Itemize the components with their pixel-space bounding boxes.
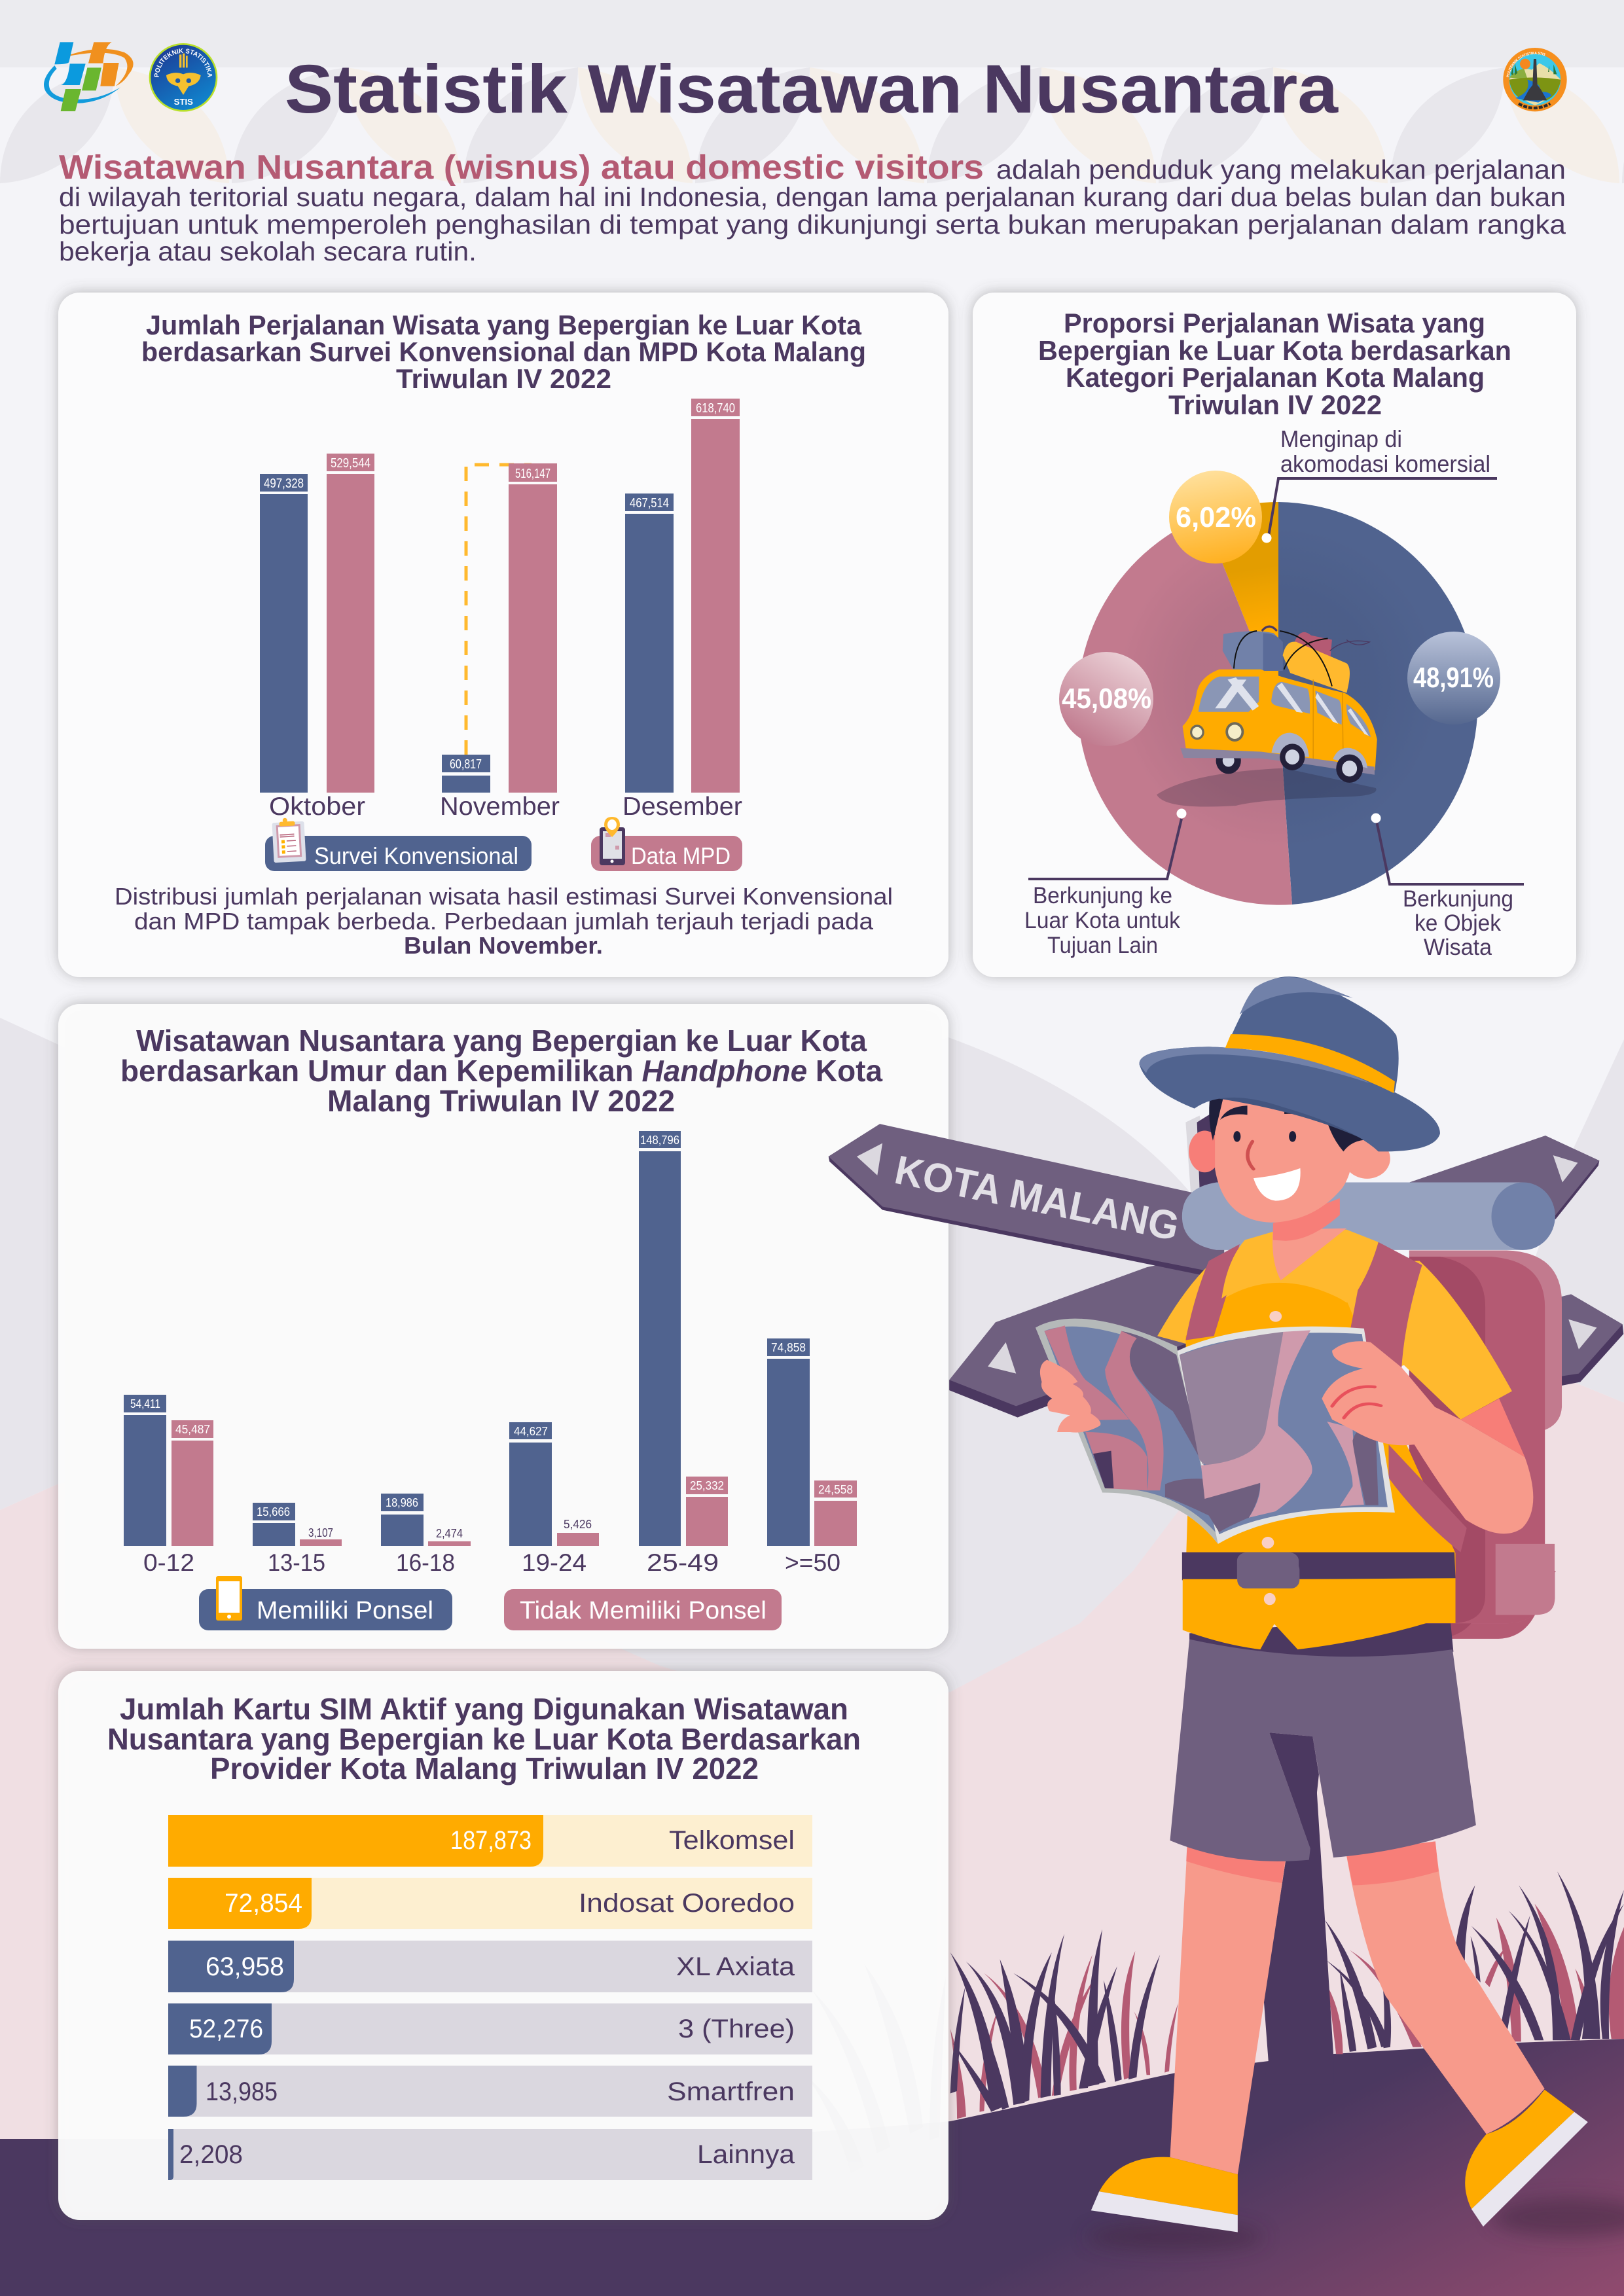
bar chart: monthly trips: 467,514: [630, 496, 669, 511]
intro text: di wilayah teritorial suatu negara, dalam hal ini Indonesia, dengan lama perjalanan kurang dari dua belas bulan dan bukan: [59, 182, 1566, 212]
bar chart: age groups: 5,426: [564, 1518, 592, 1531]
heading: Wisatawan Nusantara yang Bepergian ke Luar Kota: [136, 1024, 867, 1058]
logo: Politeknik Statistika STIS: STIS: [174, 98, 193, 107]
heading: Triwulan IV 2022: [1168, 389, 1382, 420]
intro text: bertujuan untuk memperoleh penghasilan di tempat yang dikunjungi serta bukan merupakan perjalanan dalam rangka: [59, 209, 1566, 240]
title: Statistik Wisatawan Nusantara: [285, 51, 1339, 128]
left shoe: [1091, 2157, 1238, 2232]
callout: 48,91%: [1407, 632, 1500, 725]
callout: 6,02%: [1169, 471, 1262, 564]
intro text: bekerja atau sekolah secara rutin.: [59, 236, 477, 266]
bar: Indosat Ooredoo: 72,854: [225, 1889, 302, 1918]
arrow: Kota Malang sign board: [829, 1124, 1224, 1280]
bar: Indosat Ooredoo: [168, 1878, 812, 1929]
bar: Lainnya: Lainnya: [697, 2140, 795, 2169]
logo: Kota Malang: POLITEKNIK STATISTIKA STIS: [1507, 52, 1545, 77]
bedroll: [1182, 1183, 1555, 1250]
text: chart note: dan MPD tampak berbeda. Perbedaan jumlah terjauh terjadi pada: [134, 908, 874, 935]
bar: Telkomsel: Telkomsel: [669, 1826, 795, 1855]
label: Berkunjung ke Objek Wisata: Berkunjung: [1403, 886, 1513, 912]
bar chart: monthly trips: 497,328: [264, 476, 304, 491]
map: [1036, 1319, 1395, 1544]
callout: 6,02%: 6,02%: [1176, 501, 1256, 533]
legend: Tidak Memiliki Ponsel: Tidak Memiliki Ponsel: [520, 1597, 767, 1624]
shorts: [1170, 1640, 1476, 1861]
bar chart: age groups: 54,411: [130, 1397, 160, 1410]
buttons: [1262, 1311, 1282, 1605]
callout: 45,08%: [1059, 652, 1153, 746]
illustration: hiker upper body: [1036, 977, 1562, 1623]
bar chart: age groups: 16-18: [396, 1549, 455, 1576]
label: Menginap: Menginap di: [1280, 425, 1402, 452]
legend: Memiliki Ponsel: [199, 1576, 452, 1630]
intro text: adalah penduduk yang melakukan perjalanan: [996, 154, 1566, 185]
backpack lower: [1451, 1571, 1556, 1639]
pole lower: [1264, 1774, 1334, 2084]
bar chart: age groups: 25-49: [647, 1549, 719, 1576]
intro text: [59, 149, 1566, 266]
nose: [1248, 1141, 1254, 1169]
bar: Smartfren: [168, 2066, 812, 2117]
legend: Data MPD: [591, 817, 742, 871]
icon: clipboard: [272, 817, 306, 863]
grass: [950, 1871, 1624, 2119]
panel: trip proportion: [973, 293, 1576, 977]
logo: Politeknik Statistika STIS: [149, 43, 217, 112]
bar chart: age groups: 45,487: [175, 1423, 210, 1436]
logo: Kota Malang: [1503, 48, 1567, 111]
shirt sleeves: [1157, 1261, 1512, 1420]
heading: berdasarkan Survei Konvensional dan MPD Kota Malang: [141, 336, 866, 367]
bar: XL Axiata: XL Axiata: [676, 1952, 795, 1981]
logo: BPS: [44, 42, 134, 111]
heading: Proporsi Perjalanan Wisata yang: [1064, 308, 1485, 338]
pie chart: [1077, 502, 1477, 905]
right leg: [1346, 1841, 1545, 2134]
panel: age and phone ownership: [58, 1004, 948, 1649]
bar: 3 (Three): 52,276: [189, 2015, 263, 2043]
legend: Tidak Memiliki Ponsel: [504, 1589, 782, 1630]
bar chart: monthly trips: 60,817: [450, 757, 482, 772]
text: chart note: [115, 883, 893, 959]
bar chart: monthly trips: Oktober: [269, 793, 365, 821]
heading: Triwulan IV 2022: [396, 363, 611, 394]
sign text: KOTA MALANG: [891, 1147, 1183, 1249]
callout: 45,08%: 45,08%: [1062, 683, 1151, 715]
foot shadows: [1087, 2198, 1624, 2251]
straps: [1185, 1242, 1467, 1552]
illustration: vest hem: [1183, 1562, 1555, 1649]
bar: Lainnya: [168, 2129, 812, 2180]
bar chart: age groups: 0-12: [143, 1549, 194, 1576]
bar chart: monthly trips: [260, 399, 742, 821]
bar chart: monthly trips: Desember: [623, 793, 742, 821]
label: Berkunjung ke Luar Kota: Tujuan Lain: [1047, 933, 1158, 958]
legend: Survei Konvensional: Survei Konvensional: [314, 842, 518, 869]
heading: Jumlah Perjalanan Wisata yang Bepergian ke Luar Kota: [146, 310, 862, 340]
bar: Smartfren: 13,985: [206, 2077, 278, 2106]
heading: [107, 1692, 861, 1785]
label: Berkunjung ke Objek Wisata: [1371, 813, 1524, 960]
text: chart note: Distribusi jumlah perjalanan wisata hasil estimasi Survei Konvensional: [115, 883, 893, 910]
bar chart: monthly trips: 516,147: [515, 467, 550, 481]
illustration: bus: [1157, 626, 1377, 807]
bar chart: monthly trips: 529,544: [331, 456, 370, 471]
legend: Memiliki Ponsel: Memiliki Ponsel: [257, 1597, 433, 1624]
bar chart: monthly trips: 618,740: [696, 401, 735, 416]
pole top: [1185, 1116, 1201, 1194]
heading: [120, 1024, 882, 1118]
bar: 3 (Three): [168, 2003, 812, 2054]
icon: phone with map pin: [600, 817, 625, 865]
illustration: hiker legs and shorts: [1091, 1571, 1588, 2232]
label: Berkunjung ke Luar Kota: [1024, 809, 1186, 958]
heading: Nusantara yang Bepergian ke Luar Kota Berdasarkan: [107, 1722, 861, 1756]
hair: [1209, 1088, 1371, 1151]
intro text: Wisatawan Nusantara (wisnus) atau domestic visitors: [59, 149, 984, 187]
bar chart: age groups: 148,796: [640, 1134, 679, 1147]
logo: Politeknik Statistika STIS: POLITEKNIK STATISTIKA: [154, 48, 212, 77]
arrow: upper right sign: [1394, 1136, 1599, 1219]
vest: [1184, 1283, 1456, 1623]
face: [1215, 1094, 1353, 1223]
bar chart: age groups: 15,666: [257, 1505, 290, 1518]
heading: Provider Kota Malang Triwulan IV 2022: [210, 1751, 759, 1785]
heading: Kategori Perjalanan Kota Malang: [1066, 362, 1485, 393]
bar: XL Axiata: [168, 1941, 812, 1992]
bar: Smartfren: Smartfren: [667, 2077, 795, 2106]
bar: Lainnya: 2,208: [179, 2140, 243, 2169]
label: Berkunjung ke Luar Kota: Berkunjung ke: [1033, 883, 1172, 908]
heading: berdasarkan Umur dan Kepemilikan Handphone Kota: [120, 1054, 882, 1088]
bar chart: monthly trips: November: [440, 793, 560, 821]
right arm and hand: [1322, 1341, 1533, 1534]
bar chart: age groups: 13-15: [268, 1549, 325, 1576]
left leg: [1170, 1844, 1286, 2174]
bar chart: age groups: 25,332: [690, 1479, 724, 1492]
label: Berkunjung ke Luar Kota: Luar Kota untuk: [1024, 908, 1180, 933]
bar: Telkomsel: 187,873: [450, 1826, 532, 1855]
heading: Malang Triwulan IV 2022: [327, 1084, 675, 1118]
bar chart: age groups: 3,107: [308, 1526, 333, 1539]
arrow: lower left sign: [949, 1253, 1229, 1418]
hat: [1140, 977, 1440, 1151]
bar chart: age groups: >=50: [785, 1549, 840, 1576]
label: Menginap: akomodasi komersial: [1280, 450, 1490, 477]
collar and neck: [1221, 1198, 1379, 1302]
panel: SIM cards by provider: [58, 1671, 948, 2220]
left hand: [1040, 1360, 1100, 1433]
bar chart: age groups: 18,986: [386, 1496, 418, 1509]
signpost: [829, 1109, 1623, 1418]
arrow: lower right sign: [1538, 1294, 1623, 1390]
bar: Telkomsel: [168, 1815, 812, 1867]
ears: [1189, 1130, 1390, 1179]
belt: [1182, 1552, 1456, 1587]
label: Menginap: [1262, 425, 1497, 543]
bar chart: age groups: [124, 1131, 857, 1576]
heading: [141, 310, 866, 394]
bar chart: age groups: 19-24: [522, 1549, 586, 1576]
legend: Data MPD: Data MPD: [631, 842, 731, 869]
bar: Indosat Ooredoo: Indosat Ooredoo: [579, 1889, 795, 1918]
bar: XL Axiata: 63,958: [206, 1952, 284, 1981]
bar chart: age groups: 74,858: [771, 1341, 806, 1354]
bar: 3 (Three): 3 (Three): [678, 2015, 795, 2043]
heading: [1038, 308, 1511, 420]
icon: phone: [216, 1576, 242, 1621]
bar chart: age groups: 44,627: [514, 1425, 548, 1438]
backpack: [1409, 1251, 1562, 1623]
panel: trips by month: [58, 293, 948, 977]
legend: Survei Konvensional: [265, 817, 532, 871]
heading: Bepergian ke Luar Kota berdasarkan: [1038, 335, 1511, 366]
bar chart: age groups: 24,558: [818, 1483, 853, 1496]
heading: Jumlah Kartu SIM Aktif yang Digunakan Wisatawan: [120, 1692, 848, 1726]
callout: 48,91%: 48,91%: [1413, 662, 1494, 694]
label: Berkunjung ke Objek Wisata: ke Objek: [1415, 910, 1501, 936]
text: chart note: Bulan November.: [404, 932, 603, 959]
shirt bottom: [1189, 1615, 1453, 1658]
label: Berkunjung ke Objek Wisata: Wisata: [1424, 935, 1492, 960]
right shoe: [1465, 2090, 1588, 2227]
bar chart: age groups: 2,474: [436, 1527, 463, 1540]
smile: [1254, 1168, 1301, 1201]
